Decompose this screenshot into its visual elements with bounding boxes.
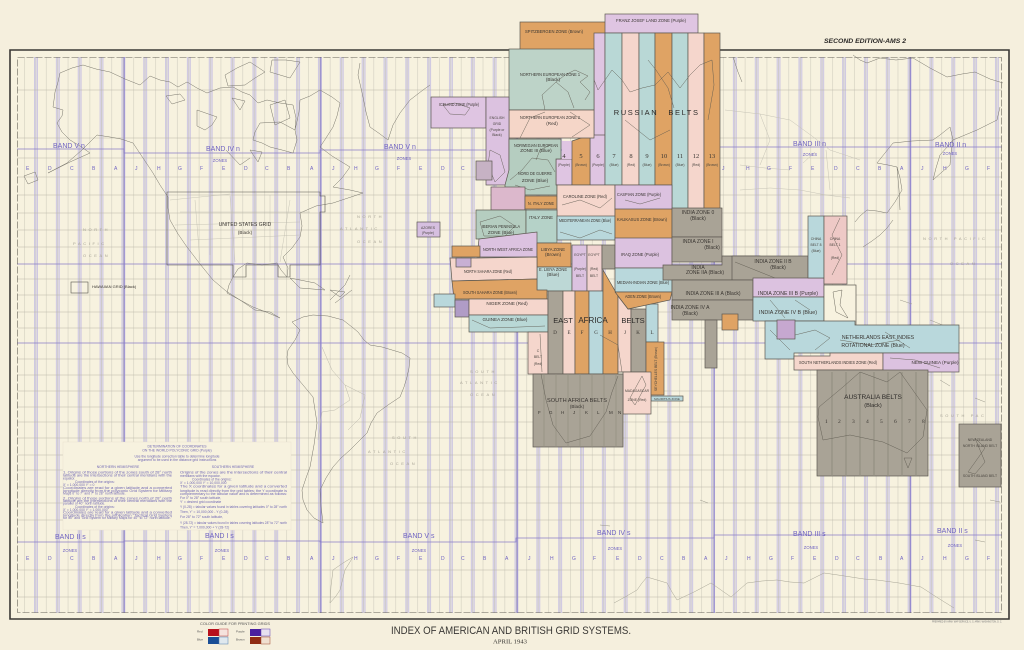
- zone: Mauritius strip: MAURITIUS ZONE: [654, 397, 680, 401]
- zone: Iceland: [431, 97, 486, 128]
- band and zone labels, bottom row: BAND II s: [55, 534, 86, 541]
- coast: Pacific islets: [600, 300, 1000, 542]
- Russian belts: (Brown): [658, 163, 670, 167]
- panel: determination of coordinates: 2. Origins of those portions of the zones north of 28° north: [63, 496, 172, 500]
- panel: determination of coordinates: Coordinates of the origins:: [192, 478, 232, 482]
- zone: English grid: (Purple or: [490, 128, 505, 132]
- coast: Arctic islands: [166, 60, 300, 165]
- Russian belts: 6: [596, 153, 600, 160]
- band and zone labels, top row: BAND II n: [935, 142, 966, 149]
- colour guide: [197, 622, 270, 644]
- zone: Kaukasus: KAUKASUS ZONE (Brown): [617, 217, 667, 222]
- zone: gray Ceylon strip: [705, 320, 717, 368]
- zone: Aden: [615, 292, 672, 309]
- zone: Lambert pink block: [491, 187, 525, 210]
- zone: China belt 1: (Red): [831, 256, 839, 260]
- panel: determination of coordinates: latitude are the intersections of their central meridians with the: [63, 499, 172, 503]
- zone: New Guinea purple: [883, 353, 959, 372]
- zone: Seychelles: [646, 342, 664, 395]
- zone: China belt 1: [824, 216, 847, 284]
- panel: determination of coordinates: parallel of 40° north latitude.: [63, 502, 105, 506]
- South Africa belts: (Black): [570, 404, 585, 409]
- Russian belts: [556, 33, 720, 209]
- panel: determination of coordinates: Y (28-72) = tabular values found in tables covering latitudes 28° to 72° north: [180, 521, 287, 525]
- zone: Cape Verde teal: [434, 294, 455, 307]
- zone: India IVA: (Black): [682, 311, 698, 317]
- zone: Java pink strip: [794, 353, 883, 370]
- zone: Mediterranean: [557, 216, 615, 240]
- coast: Caribbean and islands: [24, 172, 352, 303]
- Russian belts: 11: [677, 153, 683, 160]
- zones: purple and pink Egypt strips: BELT: [576, 274, 584, 278]
- ocean names: OCEAN: [83, 253, 110, 258]
- band and zone labels, top row: BAND V n: [384, 144, 416, 151]
- Russian belts: (Red): [627, 163, 635, 167]
- United States grid outline: (Black): [238, 230, 253, 235]
- zone: English grid: [486, 97, 509, 185]
- New Zealand belts: SOUTH ISLAND BELT: [963, 474, 997, 478]
- Russian belts: (Brown): [706, 163, 718, 167]
- zones: purple and pink Egypt strips: EGYPT: [574, 253, 586, 257]
- zone: small purple Canary: [456, 258, 471, 267]
- band and zone labels, top row: BAND III n: [793, 141, 826, 148]
- zone: Norwegian European and Nord de Guerre: NORD DE GUERRE: [518, 171, 552, 176]
- zone: English grid: ENGLISH: [490, 116, 505, 120]
- zone: Northern European 1: [509, 49, 594, 110]
- panel: determination of coordinates: Then, Y' = 10,000,000 - Y (0-28): [180, 510, 228, 514]
- band and zone labels, top row: ZONES: [397, 156, 411, 161]
- ocean names: OCEAN: [390, 461, 417, 466]
- coast: faint Asia borders: [725, 110, 860, 198]
- zone: China belt 8: [808, 216, 824, 278]
- United States grid outline: [167, 192, 325, 277]
- zone: North West Africa: NORTH WEST AFRICA ZONE: [483, 247, 533, 252]
- zone: Guinea: GUINEA ZONE (Blue): [483, 317, 528, 322]
- East Africa belts: (Red): [534, 362, 542, 366]
- zone: India IIIB: [753, 278, 824, 297]
- zone: North Sahara: [450, 257, 537, 281]
- panel: determination of coordinates: DETERMINATION OF COORDINATES: [147, 444, 207, 448]
- East Africa belts: AFRICA: [578, 316, 608, 325]
- band and zone labels, top row: BAND V n: [53, 143, 85, 150]
- panel: determination of coordinates: Y (0-28) = tabular values found in tables covering latitudes 0° to 28° north: [180, 505, 287, 509]
- zone: Spitzbergen: [520, 22, 606, 50]
- zone: North Sahara: NORTH SAHARA ZONE (Red): [464, 269, 512, 274]
- Russian belts: 4: [562, 153, 566, 160]
- zone: Norwegian European and Nord de Guerre: NORWEGIAN EUROPEAN: [514, 143, 558, 148]
- panel: determination of coordinates: Maps 0° to 7° and 7° to 28° north latitude.: [63, 492, 126, 496]
- band and zone labels, bottom row: ZONES: [215, 548, 229, 553]
- South Africa belts: SOUTH AFRICA BELTS: [547, 398, 607, 404]
- panel: determination of coordinates: complementary to the tabular value and is determined as follows:: [180, 492, 287, 496]
- East Africa belts: C: [537, 349, 540, 353]
- Russian belts: (Blue): [675, 163, 685, 167]
- New Zealand belts: NEW ZEALAND: [968, 438, 993, 442]
- zone: Irish square: [476, 161, 492, 180]
- zone: India IIB: (Black): [770, 265, 786, 271]
- colour guide: Red: [197, 630, 203, 634]
- zones: purple and pink Egypt strips: BELT: [590, 274, 598, 278]
- zone: Netherlands East Indies: NETHERLANDS EAST INDIES: [842, 335, 915, 341]
- zone: India IIIA: [672, 280, 753, 300]
- panel: determination of coordinates: X' = 1,000,000 Y' = 0: [63, 483, 95, 487]
- colour guide: Blue: [197, 638, 203, 642]
- zone: India IIB: INDIA ZONE II B: [754, 259, 792, 265]
- zones: purple and pink Egypt strips: EGYPT: [588, 253, 600, 257]
- Russian belts: 9: [645, 153, 649, 160]
- coast: North America: [48, 65, 363, 318]
- panel: determination of coordinates: Coordinates of the origins:: [75, 480, 115, 484]
- zone: Franz Josef Land: [605, 14, 698, 33]
- band and zone labels, top row: ZONES: [943, 151, 957, 156]
- ocean names: OCEAN: [357, 239, 384, 244]
- East Africa belts: K: [636, 331, 640, 336]
- zone: Libya: LIBYA ZONE: [541, 247, 565, 252]
- ocean names: [73, 214, 988, 466]
- zone: Norwegian European and Nord de Guerre: ZONE (Blue): [522, 178, 549, 183]
- zone: Azores: (Purple): [422, 231, 434, 235]
- panel: determination of coordinates: X' = 1,000,000 Y' = 1,000,000: [63, 508, 108, 512]
- zone: India IIB: [732, 256, 808, 280]
- band and zone labels, top row: [26, 141, 990, 172]
- East Africa belts: F: [581, 331, 584, 336]
- zone: Libya: (Brown): [545, 252, 562, 257]
- band and zone labels, bottom row: [26, 528, 990, 562]
- zone: Azores: [417, 222, 440, 237]
- zone: India IIA: ZONE IIA (Black): [686, 270, 724, 276]
- Hawaiian grid: [71, 282, 137, 293]
- ocean names: OCEAN: [470, 392, 497, 397]
- panel: determination of coordinates: latitude are the intersections of their central meridians with the: [63, 474, 172, 478]
- panel: determination of coordinates: Use the longitude correction table to determine longitude: [134, 454, 220, 458]
- zone: East Libya: (Blue): [547, 272, 560, 277]
- zone: Madagascar: [623, 372, 651, 414]
- zone: English grid: Black): [492, 133, 502, 137]
- colour guide: COLOR GUIDE FOR PRINTING GRIDS: [200, 622, 270, 626]
- Hawaiian grid: HAWAIIAN GRID (Black): [92, 284, 137, 289]
- zone: Northern European 1: NORTHERN EUROPEAN ZONE 1: [520, 72, 580, 77]
- zone: India I: [672, 237, 722, 262]
- panel: determination of coordinates: 1. Origins of those portions of the zones south of 28° north: [63, 470, 172, 474]
- colour guide: Brown: [236, 638, 245, 642]
- zone: Iraq: IRAQ ZONE (Purple): [621, 252, 659, 257]
- zone: Italy: ITALY ZONE: [529, 215, 553, 220]
- zone: Netherlands East Indies: [765, 321, 959, 359]
- zone: China belt 1: BELT 1: [830, 243, 841, 247]
- East Africa belts: BELTS: [621, 316, 645, 325]
- panel: determination of coordinates: ON THE WORLD POLYCONIC GRID (Purple): [142, 448, 212, 452]
- ocean names: SOUTH: [392, 435, 419, 440]
- zone: Iceland: ICELAND ZONE (Purple): [439, 102, 479, 107]
- zone: Northern European 2: [509, 110, 594, 138]
- zone: Borneo purple: [777, 320, 795, 339]
- zone: Madagascar: ZONE (Red): [628, 398, 646, 402]
- band and zone labels, bottom row: ZONES: [412, 548, 426, 553]
- panel: determination of coordinates: Y' = desired grid coordinate: [180, 500, 221, 504]
- zone: Caspian: [615, 185, 672, 210]
- coast: South America borders: [318, 347, 365, 440]
- panel: determination of coordinates: The X coordinates for a given latitude and a converted: [180, 484, 287, 488]
- panel: determination of coordinates: Coordinates are read for a given latitude and a converted: [63, 510, 172, 514]
- ocean names: OCEAN: [950, 261, 977, 266]
- band and zone labels, bottom row: ZONES: [948, 543, 962, 548]
- zone: India 0: INDIA ZONE 0: [682, 210, 714, 216]
- ocean names: PACIFIC: [73, 241, 107, 246]
- South Africa belts: [533, 374, 623, 447]
- New Zealand belts: NORTH ISLAND BELT: [963, 444, 997, 448]
- band and zone labels, bottom row: ZONES: [63, 548, 77, 553]
- zone: China belt 1: CHINA: [830, 237, 841, 241]
- Russian belts: (Purple): [592, 163, 604, 167]
- zone: India IVA: [671, 300, 753, 320]
- coast: northeast Asia: [733, 55, 1003, 247]
- zone: Libya: [537, 243, 571, 267]
- ocean names: ATLANTIC: [368, 449, 408, 454]
- band and zone labels, top row: BAND IV n: [206, 146, 240, 153]
- Australia belts: [817, 370, 928, 476]
- panel: determination of coordinates: Then, Y' = 7,000,000 + Y (28-72): [180, 526, 229, 530]
- zone: orange square: [722, 314, 738, 330]
- zone: Iraq: [615, 238, 672, 268]
- zone: North Italy: N. ITALY ZONE: [528, 201, 554, 206]
- ocean names: NORTH: [83, 227, 110, 232]
- coast: Antarctica: [330, 557, 954, 608]
- zone: India IIIB: INDIA ZONE III B (Purple): [758, 291, 818, 297]
- zone: India 0: (Black): [690, 216, 706, 222]
- zone: New Guinea purple: NEW GUINEA (Purple): [912, 360, 959, 365]
- edition label: SECOND EDITION-AMS 2: [824, 39, 907, 45]
- zone: Northern European 2: NORTHERN EUROPEAN ZONE 2: [520, 115, 580, 120]
- subtitle: date: APRIL 1943: [493, 638, 527, 646]
- Russian belts: 10: [661, 153, 667, 160]
- ocean names: NORTH PACIFIC: [923, 236, 988, 241]
- ocean names: NORTH: [357, 214, 384, 219]
- zone: Caroline: [557, 185, 615, 217]
- zones: purple and pink Egypt strips: [572, 245, 615, 291]
- Russian belts: 5: [579, 153, 583, 160]
- band and zone labels, bottom row: BAND IV s: [597, 530, 631, 537]
- zone: India 0: [672, 208, 722, 237]
- zone: South Sahara: [452, 279, 547, 299]
- zone: small purple square: [455, 300, 469, 317]
- ocean names: SOUTH: [470, 369, 497, 374]
- zone: India IVB: [753, 297, 824, 321]
- zone: Kaukasus: [615, 209, 672, 240]
- panel: determination of coordinates: argument to be used in the distance grid instructions: [138, 458, 217, 462]
- zone: Netherlands East Indies: ROTATIONAL ZONE (Blue): [841, 343, 905, 349]
- band and zone labels, top row: ZONES: [213, 158, 227, 163]
- band and zone labels, top row: ZONES: [803, 152, 817, 157]
- band and zone labels, bottom row: BAND II s: [937, 528, 968, 535]
- panel: determination of coordinates: Origins of the zones are the intersections of their central: [180, 470, 287, 474]
- zone: Guinea: [469, 315, 548, 332]
- Russian belts: 8: [629, 153, 633, 160]
- zone: North Italy: [525, 196, 557, 209]
- zone: Azores: AZORES: [421, 226, 436, 230]
- band and zone labels, top row: EDCBAJHGFEDCBAJHGFEDCJHGFEDCBAJHGF: [26, 166, 990, 172]
- East Africa belts: H: [608, 331, 612, 336]
- panel: determination of coordinates: meridians with the equator.: [180, 474, 221, 478]
- United States grid outline: UNITED STATES GRID: [219, 222, 272, 228]
- band and zone labels, bottom row: BAND I s: [205, 533, 234, 540]
- zone: Caroline: CAROLINE ZONE (Red): [563, 194, 607, 199]
- zone: Spitzbergen: SPITZBERGEN ZONE (Brown): [525, 29, 583, 34]
- zones: purple and pink Egypt strips: (Red): [590, 267, 598, 271]
- zone: small orange: [452, 246, 480, 257]
- zone: Niger: [469, 299, 548, 315]
- panel: determination of coordinates: NORTHERN HEMISPHERE: [97, 465, 140, 469]
- zone: English grid: GRID: [493, 122, 502, 126]
- zone: India IVB: INDIA ZONE IV B (Blue): [759, 310, 817, 316]
- zone: Seychelles: SEYCHELLES BELT (Brown): [654, 347, 658, 391]
- East Africa belts: J: [624, 331, 626, 336]
- zone: Italy: [526, 210, 557, 243]
- Russian belts: (Red): [692, 163, 700, 167]
- panel: determination of coordinates: for 40° and 'Grid System for Military Maps for 40° to 72° north latitude.": [63, 516, 173, 520]
- Russian belts: (Brown): [575, 163, 587, 167]
- Russian belts: RUSSIAN: [614, 108, 658, 117]
- zone: Madagascar: MADAGASCAR: [625, 389, 650, 393]
- band and zone labels, bottom row: ZONES: [608, 546, 622, 551]
- band and zone labels, bottom row: BAND V s: [403, 533, 435, 540]
- title: INDEX OF AMERICAN AND BRITISH GRID SYSTEMS.: [391, 625, 631, 637]
- zone: Median-Indian: MEDIAN-INDIAN ZONE (Blue): [617, 280, 669, 285]
- zone: South Sahara: SOUTH SAHARA ZONE (Brown): [463, 290, 517, 295]
- panel: determination of coordinates: Coordinates are read for a given latitude and a converted: [63, 486, 172, 490]
- South Africa belts: FGHJKLMN: [538, 410, 621, 415]
- East Africa belts: BELT: [534, 355, 542, 359]
- zone: China belt 8: BELT 8: [810, 243, 822, 247]
- zone: India IIA: [663, 256, 760, 280]
- Russian belts: BELTS: [668, 108, 700, 117]
- zone: North West Africa: [477, 232, 537, 257]
- zone: Niger: NIGER ZONE (Red): [486, 301, 528, 306]
- zone: India IVA: INDIA ZONE IV A: [671, 305, 710, 311]
- Russian belts: 12: [693, 153, 699, 160]
- zone: India I: INDIA ZONE I: [682, 239, 714, 245]
- zone: Mauritius strip: [651, 396, 683, 401]
- zone: Median-Indian: [615, 268, 672, 292]
- Russian belts: (Blue): [609, 163, 619, 167]
- zones: purple and pink Egypt strips: (Purple): [574, 267, 586, 271]
- colour guide: Purple: [236, 630, 245, 634]
- band and zone labels, bottom row: EDCBAJHGFEDCBAJHGFEDCBAJHGFEDCBAJHGFEDCBAJHGF: [26, 556, 990, 562]
- zone: India I: (Black): [704, 245, 720, 251]
- zone: Iberian Peninsula: IBERIAN PENINSULA: [482, 224, 521, 229]
- East Africa belts: EAST: [553, 316, 573, 325]
- zone: India IIIA: INDIA ZONE III A (Black): [685, 291, 741, 297]
- East Africa belts: G: [594, 331, 598, 336]
- zone: China belt 8: (Blue): [811, 249, 821, 253]
- zone: Norwegian European and Nord de Guerre: ZONE III (Blue): [520, 148, 552, 153]
- panel: determination of coordinates: X' = 1,000,000 Y' = 10,000,000: [180, 481, 227, 485]
- zone: Iberian Peninsula: [476, 210, 526, 239]
- zone: India IIA: INDIA: [691, 265, 705, 271]
- zone: Franz Josef Land: FRANZ JOSEF LAND ZONE (Purple): [616, 18, 686, 23]
- panel: determination of coordinates: Coordinates of the origins:: [75, 505, 115, 509]
- zone: Northern European 1: (Black): [546, 77, 561, 82]
- panel: determination of coordinates: For 0° to 28° south latitude,: [180, 496, 221, 500]
- zone: Mediterranean: MEDITERRANEAN ZONE (Blue): [559, 218, 611, 223]
- ocean names: SOUTH PAC: [940, 413, 986, 418]
- coast: Greenland: [358, 63, 430, 140]
- band and zone labels, bottom row: BAND III s: [793, 531, 826, 538]
- zone: Northern European 2: (Red): [546, 121, 558, 126]
- Australia belts: (Black): [864, 403, 882, 409]
- panel: determination of coordinates: [63, 442, 291, 530]
- panel: determination of coordinates: For 28° to 72° south latitude,: [180, 515, 223, 519]
- printer note: PREPARED BY ARMY MAP SERVICE, U. S. ARMY, WASHINGTON, D. C.: [932, 620, 1002, 624]
- zone: Iberian Peninsula: ZONE (Blue): [488, 230, 515, 235]
- zone: Aden: ADEN ZONE (Brown): [625, 294, 661, 299]
- panel: determination of coordinates: longitude directly from the polyconic Grid System for Military: [63, 489, 172, 493]
- East Africa belts: L: [650, 331, 654, 336]
- panel: determination of coordinates: longitude is read directly from the grid tables; the Y coordinate is: [180, 489, 287, 493]
- East Africa belts: D: [553, 331, 557, 336]
- panel: determination of coordinates: SOUTHERN HEMISPHERE: [212, 465, 255, 469]
- zone: China belt 8: CHINA: [811, 237, 822, 241]
- New Zealand belts: [959, 424, 1001, 487]
- East Africa belts: E: [567, 331, 571, 336]
- Russian belts: (Blue): [642, 163, 652, 167]
- zone: Java pink strip: SOUTH NETHERLANDS INDIES ZONE (Red): [799, 360, 877, 365]
- ocean names: ATLANTIC: [340, 226, 380, 231]
- Australia belts: 12345678: [825, 419, 925, 425]
- panel: determination of coordinates: longitude directly from the publication "Tactical Grid System: [63, 514, 172, 518]
- ocean names: ATLANTIC: [460, 380, 500, 385]
- Russian belts: (Purple): [558, 163, 570, 167]
- band and zone labels, bottom row: ZONES: [804, 545, 818, 550]
- coast: South America: [287, 315, 410, 523]
- East Africa belts: [528, 270, 658, 374]
- Russian belts: 7: [612, 153, 616, 160]
- zone: Norwegian European and Nord de Guerre: [505, 139, 561, 195]
- panel: determination of coordinates: equator.: [63, 476, 75, 480]
- zone: East Libya: E. LIBYA ZONE: [539, 267, 567, 272]
- Russian belts: 13: [709, 153, 715, 160]
- zone: Caspian: CASPIAN ZONE (Purple): [617, 192, 661, 197]
- Australia belts: AUSTRALIA BELTS: [844, 394, 902, 401]
- zone: East Libya: [537, 267, 572, 291]
- zone: Philippines outline: [824, 285, 856, 325]
